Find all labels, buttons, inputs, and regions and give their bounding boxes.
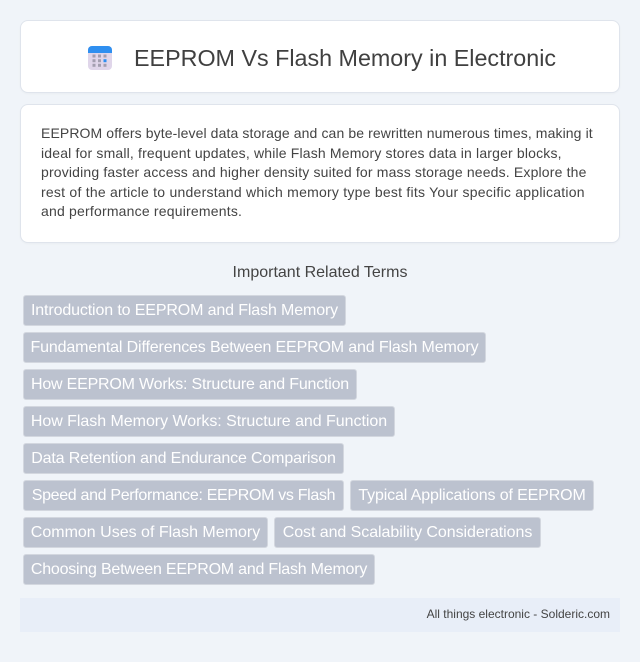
tag: Data Retention and Endurance Comparison (31, 450, 336, 467)
tag: How Flash Memory Works: Structure and Function (31, 413, 387, 430)
title: EEPROM Vs Flash Memory in Electronic (134, 45, 556, 71)
tag: Choosing Between EEPROM and Flash Memory (31, 561, 367, 578)
tag (23, 295, 346, 326)
intro text card (20, 104, 620, 243)
heading: important related terms: Important Related Terms (233, 264, 407, 281)
tag (23, 443, 344, 474)
intro paragraph: ideal for small, frequent updates, while Flash Memory stores data in larger blocks, (41, 145, 562, 161)
tag: Common Uses of Flash Memory (31, 524, 260, 541)
tag: Fundamental Differences Between EEPROM and Flash Memory (31, 339, 478, 356)
tag: Speed and Performance: EEPROM vs Flash (32, 487, 335, 504)
footer bar (20, 598, 620, 632)
tag: Cost and Scalability Considerations (283, 524, 532, 541)
tag (23, 480, 344, 511)
intro paragraph: and performance requirements. (41, 203, 242, 219)
intro paragraph (41, 125, 593, 219)
tag (23, 517, 268, 548)
tag: Introduction to EEPROM and Flash Memory (31, 302, 338, 319)
footer credit: All things electronic - Solderic.com (427, 607, 610, 621)
tag (23, 406, 395, 437)
intro paragraph: providing faster access and higher density suited for mass storage needs. Explore the (41, 164, 587, 180)
icon: calendar (88, 46, 112, 70)
tag (23, 369, 357, 400)
tag: Typical Applications of EEPROM (358, 487, 586, 504)
title card (20, 20, 620, 93)
intro paragraph: rest of the article to understand which memory type best fits Your specific application (41, 184, 585, 200)
intro paragraph: EEPROM offers byte-level data storage and can be rewritten numerous times, making it (41, 125, 593, 141)
tag (274, 517, 541, 548)
tag (23, 554, 375, 585)
tag (23, 332, 486, 363)
tag: How EEPROM Works: Structure and Function (31, 376, 349, 393)
tag (350, 480, 594, 511)
